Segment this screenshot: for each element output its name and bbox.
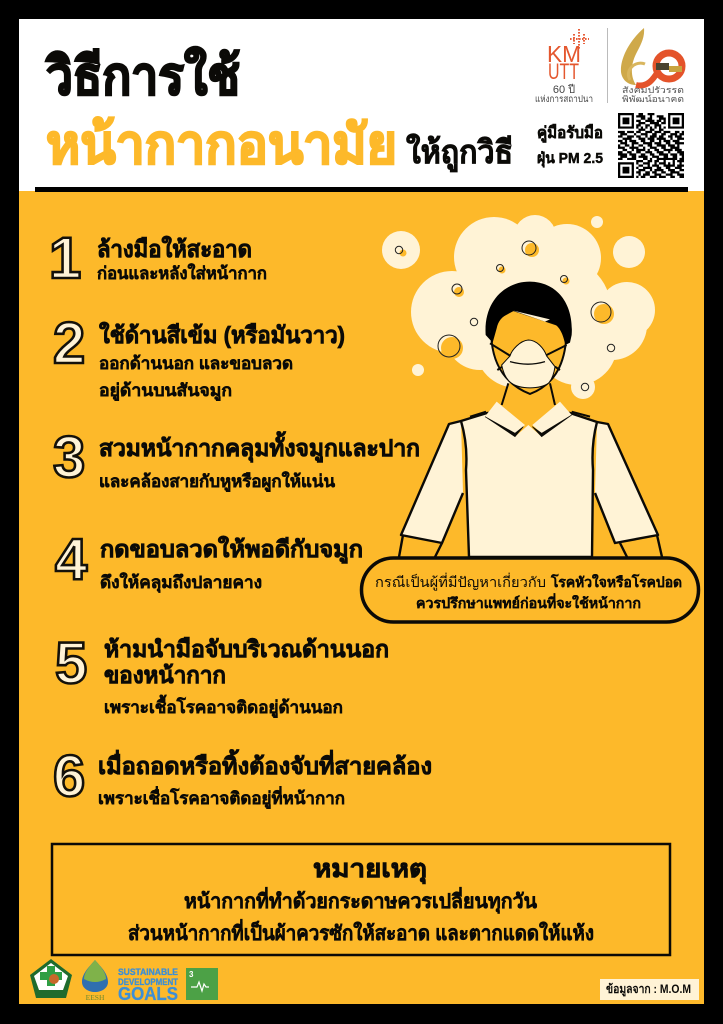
step 4: 4: [55, 527, 87, 592]
logo: sustainable development goals: [118, 967, 178, 1004]
step 4: [55, 527, 363, 593]
step 2: ออกด้านนอก และขอบลวด: [99, 354, 293, 373]
step 3: และคล้องสายกับหูหรือผูกให้แน่น: [99, 471, 335, 493]
step 3: 3: [53, 425, 85, 490]
callout: heart or lung disease warning: โรคหัวใจหรือโรคปอด: [550, 573, 682, 590]
step 5: ห้ามนำมือจับบริเวณด้านนอก: [104, 636, 389, 662]
logo: KMUTT 60 years: [535, 29, 593, 105]
handbook label: [537, 124, 603, 168]
logo: sustainable development goals: SUSTAINABLE: [118, 967, 178, 977]
dust cloud: [382, 215, 655, 399]
callout: heart or lung disease warning: [362, 558, 698, 622]
head and mask: [470, 282, 590, 437]
step 1: 1: [49, 226, 81, 291]
logo: 60th anniversary: สังคมปรัวรรต: [622, 85, 684, 95]
note box: ส่วนหน้ากากที่เป็นผ้าควรซักให้สะอาด และตากแดดให้แห้ง: [128, 918, 594, 945]
shirt: [399, 413, 662, 557]
logo: sustainable development goals: GOALS: [118, 984, 178, 1004]
callout: heart or lung disease warning: ควรปรึกษาแพทย์ก่อนที่จะใช้หน้ากาก: [416, 593, 641, 611]
title line 2 highlighted: หน้ากากอนามัย: [46, 115, 397, 175]
logo: health care shield: [30, 959, 72, 998]
logo: KMUTT 60 years: KM: [547, 41, 581, 67]
step 1: ก่อนและหลังใส่หน้ากาก: [97, 263, 267, 283]
logo: 60th anniversary: [621, 28, 684, 104]
title line 1: วิธีการใช้: [45, 46, 240, 106]
icon: SDG 3 good health: [186, 968, 218, 1000]
step 2: [53, 311, 345, 402]
step 2: อยู่ด้านบนสันจมูก: [99, 381, 232, 402]
illustration: person in mask with dust cloud: [382, 215, 662, 557]
icon: SDG 3 good health: 3: [189, 970, 194, 979]
step 4: ดึงให้คลุมถึงปลายคาง: [100, 572, 262, 593]
logo: KMUTT 60 years: UTT: [548, 59, 579, 84]
callout: heart or lung disease warning: กรณีเป็นผู้ที่มีปัญหาเกี่ยวกับ: [375, 573, 546, 591]
step 2: 2: [53, 311, 85, 376]
note box: หมายเหตุ: [313, 855, 427, 885]
step 6: 6: [53, 744, 85, 809]
step 4: กดขอบลวดให้พอดีกับจมูก: [100, 535, 363, 564]
step 6: เมื่อถอดหรือทิ้งต้องจับที่สายคล้อง: [98, 749, 432, 779]
source tag: ข้อมูลจาก : M.O.M: [606, 982, 691, 997]
logo: EESH: EESH: [86, 993, 105, 1002]
panel: yellow body: [19, 191, 704, 1004]
note box: หน้ากากที่ทำด้วยกระดาษควรเปลี่ยนทุกวัน: [184, 886, 537, 914]
step 3: [53, 425, 420, 493]
step 1: [49, 226, 267, 291]
step 6: เพราะเชื่อโรคอาจติดอยู่ที่หน้ากาก: [98, 786, 345, 810]
note box: [52, 844, 670, 955]
step 5: เพราะเชื้อโรคอาจติดอยู่ด้านนอก: [104, 694, 343, 719]
source tag: [600, 979, 699, 1000]
logo: EESH: [82, 960, 108, 1002]
step 2: ใช้ด้านสีเข้ม (หรือมันวาว): [99, 321, 345, 348]
title line 2 suffix: ให้ถูกวิธี: [406, 133, 513, 173]
step 3: สวมหน้ากากคลุมทั้งจมูกและปาก: [99, 431, 420, 463]
logo: KMUTT 60 years: แห่งการสถาปนา: [535, 94, 593, 105]
step 5: [55, 631, 389, 719]
dust particles: [395, 241, 615, 391]
step 1: ล้างมือให้สะอาด: [97, 235, 252, 262]
QR code: [618, 114, 684, 177]
step 5: 5: [55, 631, 87, 696]
logo: sustainable development goals: DEVELOPMENT: [118, 977, 178, 987]
logo: 60th anniversary: พิพัฒน์อนาคต: [622, 94, 684, 104]
handbook label: คู่มือรับมือ: [537, 124, 603, 144]
handbook label: ฝุ่น PM 2.5: [537, 150, 603, 168]
logo: KMUTT 60 years: 60 ปี: [553, 83, 575, 96]
step 5: ของหน้ากาก: [104, 662, 226, 688]
panel: header: [19, 19, 704, 191]
step 6: [53, 744, 432, 810]
